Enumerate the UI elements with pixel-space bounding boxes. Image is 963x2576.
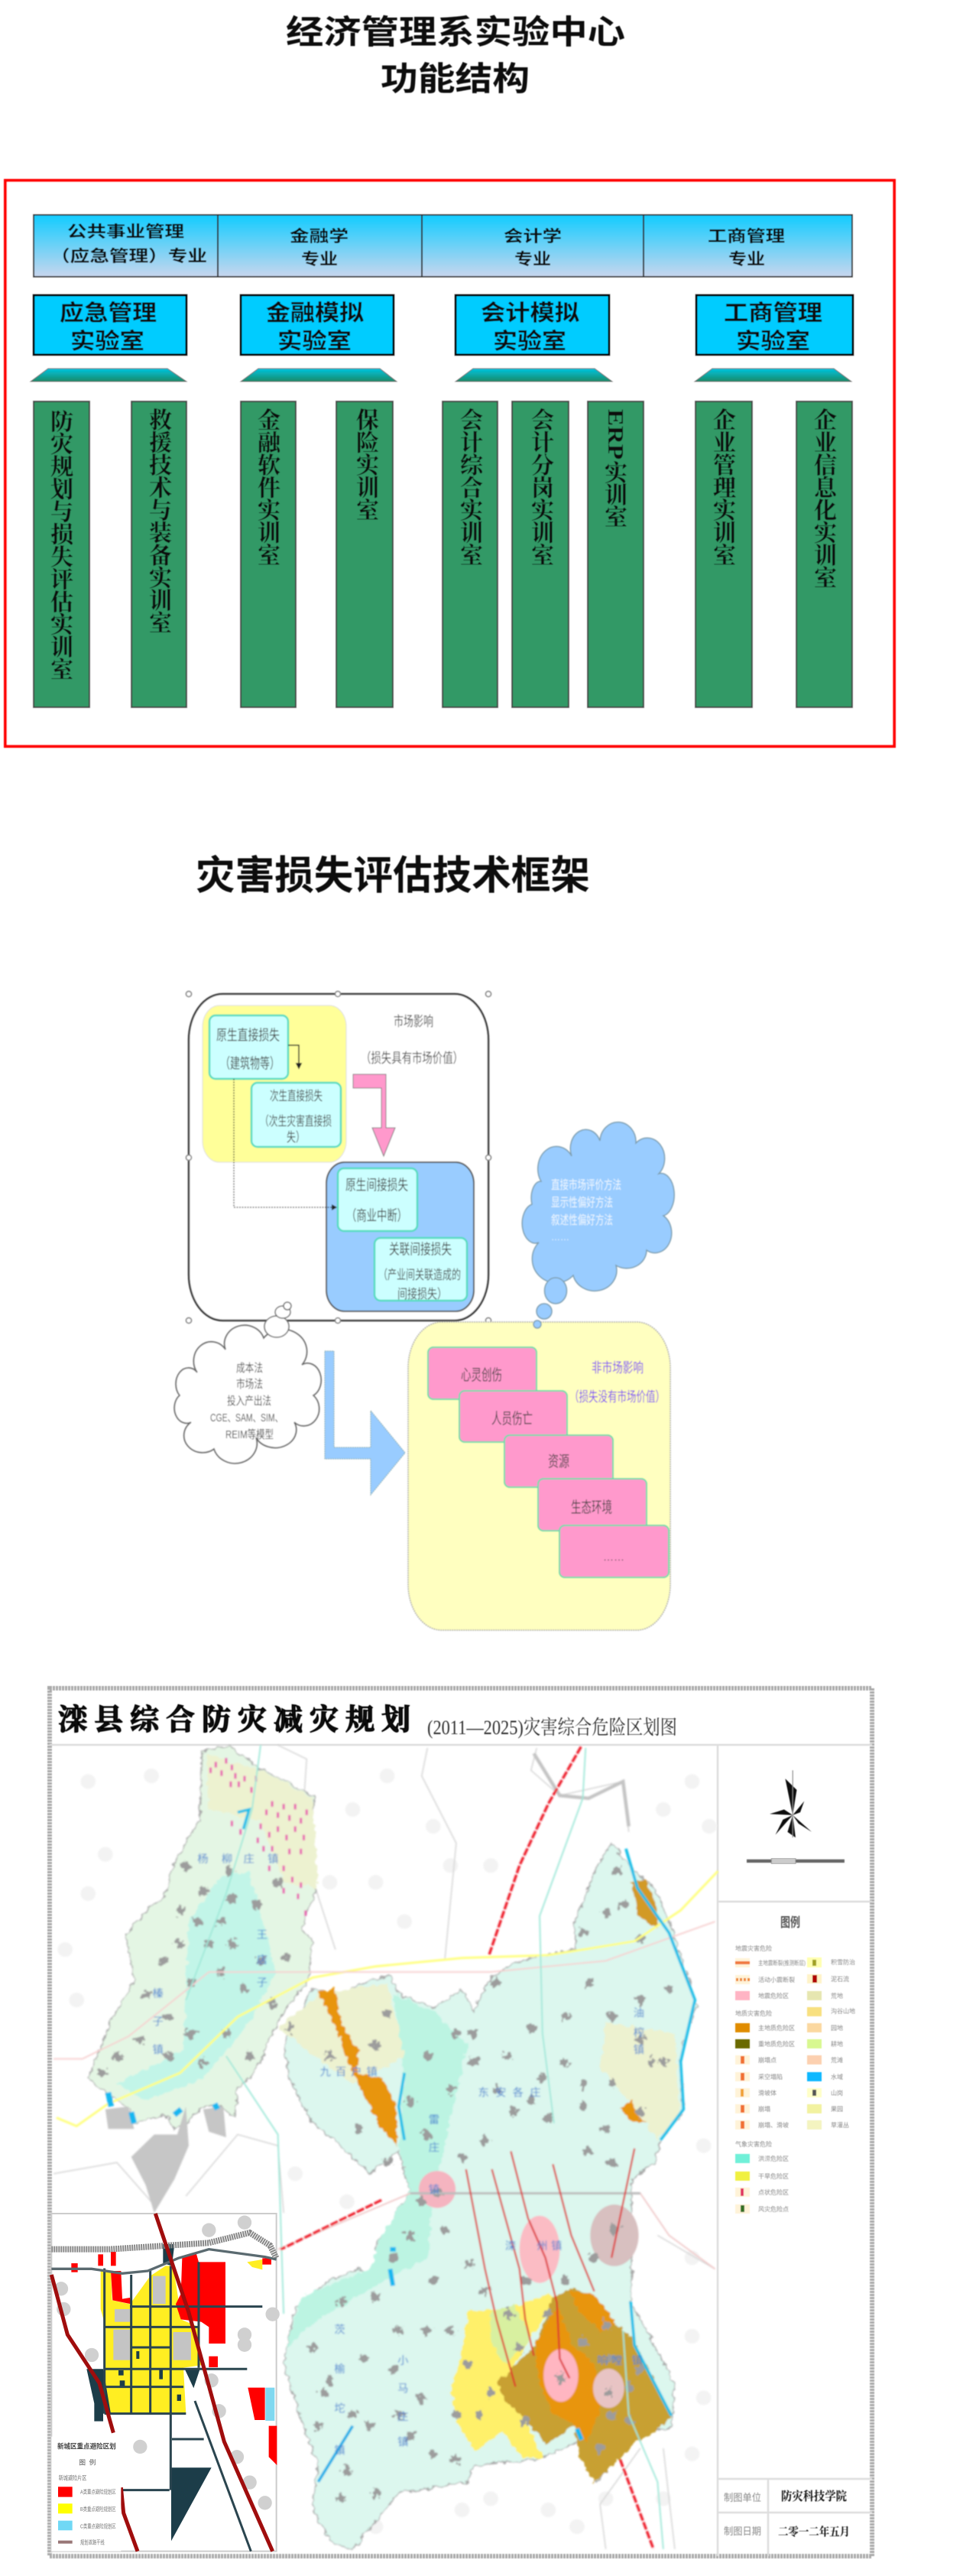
cloud: valuation methods for market losses: 投入产出法 [227,1395,271,1408]
red frame [5,180,894,746]
legend labels [735,1944,855,2213]
legend labels: 荒滩 [831,2056,843,2064]
column labels: 会计综合实训室 [460,408,485,569]
map credits: 二零一二年五月 [778,2525,850,2539]
zone: deeper flood band [287,1994,468,2347]
card: ecological environment: 生态环境 [571,1499,612,1516]
legend labels: 沟谷山地 [831,2007,855,2015]
railway [51,2233,277,2258]
legend labels: 重地质危险区 [758,2040,795,2048]
column labels: 防灾规划与损失评估实训室 [50,410,74,684]
legend labels: 果园 [831,2106,843,2113]
legend labels: 洪涝危险区 [758,2155,789,2162]
map title [58,1704,677,1739]
legend labels: 采空塌陷 [758,2073,783,2081]
panel: market impact [186,991,491,1323]
inset legend [51,2437,121,2552]
town names: 雷庄镇 [429,2113,439,2195]
regions with rough edges [88,1746,697,2549]
lab box: finance simulation: 实验室 [277,329,352,354]
town names: 九百户镇 [320,2066,378,2078]
major header bar: 金融学 [290,227,349,245]
training room columns [34,401,852,707]
title: lab centre function structure: 经济管理系实验中心 [286,15,625,51]
legend swatches [735,1957,822,2214]
maroon expressways [51,2214,273,2552]
inset legend: 图例 [79,2457,96,2466]
zone: pink seismic hazard circles [419,2171,638,2408]
title: lab centre function structure: 功能结构 [381,61,530,98]
major header bar: 专业 [514,251,551,268]
arrow: blue bent arrow [325,1351,405,1495]
cloud: valuation methods for non-market losses: 显示性偏好方法 [551,1196,613,1210]
map inset: new town key evacuation zoning [51,2214,277,2552]
panel: indirect losses: （商业中断） [346,1207,407,1224]
map title: (2011—2025)灾害综合危险区划图 [427,1717,677,1739]
panel: direct losses: （建筑物等） [220,1055,280,1072]
panel: indirect losses: 原生间接损失 [345,1177,408,1194]
yellow zoning [101,2266,201,2414]
cloud: valuation methods for non-market losses: 叙述性偏好方法 [551,1213,613,1227]
inset legend: C类重点避险规划区 [80,2523,116,2530]
legend labels: 山岗 [831,2089,843,2097]
column labels: 金融软件实训室 [258,408,282,569]
town names: 榛子镇 [153,1987,164,2055]
gray settlements in inset [61,2223,273,2503]
card: resources: 资源 [548,1453,569,1470]
panel: indirect losses: 关联间接损失 [389,1241,452,1258]
zone: north-west mint band [117,1871,276,2101]
arrow: pink bent arrow [353,1074,395,1156]
legend labels: 风灾危险点 [758,2205,789,2213]
panel: direct losses: （次生灾害直接损 [260,1114,332,1129]
town names: 茨榆坨镇 [334,2324,345,2456]
chart: loss assessment framework diagram [174,991,674,1630]
panel: market impact: 市场影响 [394,1014,433,1029]
legend labels: 干旱危险区 [758,2172,789,2180]
lab box: finance simulation: 金融模拟 [266,300,364,326]
cloud: valuation methods for non-market losses: 直接市场评价方法 [551,1178,621,1192]
zone: brown geological hazard area [497,2288,671,2483]
panel: non-market impact [408,1322,670,1630]
arrow: dotted link to indirect loss [234,1079,337,1210]
legend: 图例 [780,1915,800,1930]
legend labels: 荒地 [831,1992,843,1999]
zone: orange geological hazard band [318,1879,657,2442]
zones: pale highland [206,1753,680,2140]
column labels: 会计分岗实训室 [531,408,555,569]
lab box: accounting simulation: 会计模拟 [481,300,579,326]
lab box: business administration: 工商管理 [724,300,822,326]
region: central and southern county [284,1843,697,2549]
town names [153,1853,644,2456]
panel: indirect losses: 间接损失） [397,1287,447,1301]
inset legend: B类重点避险规划区 [80,2506,116,2513]
legend labels: 点状危险区 [758,2188,789,2196]
magenta landslide marks [211,1758,306,1916]
gray blocks in yellow zoning [113,2276,191,2360]
major header bar: 专业 [301,251,338,268]
legend labels: 滑坡体 [758,2089,777,2097]
major header bar: （应急管理）专业 [50,247,207,265]
column labels: ERP [603,409,627,460]
map credits: 制图日期 [724,2526,761,2537]
panel: direct losses: 失） [287,1130,305,1145]
zone: yellow drought area [450,2294,557,2457]
column labels: 企业信息化实训室 [814,408,838,592]
map credits [724,2489,850,2539]
major header bar: 专业 [728,251,765,268]
neighbouring county borders [54,1745,715,2549]
major header bar [34,215,852,277]
roads and rivers [54,1745,718,2549]
settlements [102,1866,669,2499]
town names: 油榨镇 [634,2007,644,2055]
active fault lines [466,2149,634,2386]
cloud: valuation methods for market losses: 成本法 [236,1362,263,1375]
lab box: business administration [696,295,853,355]
region: north-west lobe [88,1746,317,2129]
title: disaster loss assessment framework: 灾害损失评估技术框架 [196,854,590,898]
card: casualties: 人员伤亡 [491,1410,533,1428]
panel: market impact: （损失具有市场价值） [361,1051,463,1066]
legend labels: 主地震断裂(推测断层) [758,1959,806,1967]
panel: direct losses: 次生直接损失 [270,1089,323,1103]
legend labels: 水域 [831,2073,843,2081]
major header bar: 会计学 [504,227,562,245]
card: mental trauma: 心灵创伤 [461,1366,502,1384]
map frame and panes [50,1688,872,2556]
gray built-up patch south of the north-west lobe [105,2107,226,2213]
map credits: 制图单位 [724,2492,761,2503]
dark teal blocks [86,2244,212,2541]
faint neighbouring settlements [65,1776,709,2527]
map title: 滦县综合防灾减灾规划 [58,1704,410,1736]
panel: direct losses [203,1005,346,1162]
trapezoid connectors [31,369,851,382]
legend labels: 耕地 [831,2040,843,2048]
lab box: emergency management [34,295,186,355]
column labels: 救援技术与装备实训室 [149,408,173,636]
cloud: valuation methods for market losses: REIM等模型 [225,1428,274,1441]
major header bar: 工商管理 [708,228,785,245]
title: lab centre function structure [286,15,625,98]
lab box: accounting simulation: 实验室 [493,329,566,354]
legend labels: 园地 [831,2024,843,2032]
cloud: valuation methods for market losses: CGE、SAM、SIM、 [210,1411,283,1424]
zone: pale green transition [491,2305,532,2364]
map: county hazard zones [54,1745,718,2549]
card: casualties [459,1391,567,1442]
legend labels: 地震灾害危险 [735,1944,772,1952]
column labels: 实训室 [605,461,628,531]
town names: 滦州镇 [505,2240,562,2252]
town names: 王店子 [257,1928,268,1988]
legend labels: 气象灾害危险 [735,2140,772,2148]
legend labels: 积雪防治 [831,1958,855,1966]
legend labels: 草灌丛 [831,2121,849,2129]
lab box: accounting simulation [456,295,609,355]
town names: 杨柳庄镇 [197,1853,278,1865]
legend labels: 崩塌 [758,2105,770,2113]
panel: Luan county hazard zoning map [50,1688,872,2556]
panel: indirect losses [326,1162,474,1311]
panel: non-market impact: （损失没有市场价值） [569,1389,665,1405]
panel: direct losses: 原生直接损失 [216,1027,280,1044]
lab box: finance simulation [241,295,394,355]
cloud: valuation methods for non-market losses [522,1122,674,1328]
legend labels: 地质灾害危险 [735,2009,772,2017]
town names: 东安各庄 [478,2087,541,2099]
map credits: 防灾科技学院 [781,2489,847,2503]
lab box: emergency management: 实验室 [70,329,144,354]
cyan zoning [265,2388,274,2421]
legend labels: 崩塌、滑坡 [758,2121,789,2129]
town names: 响嘡镇 [597,2354,643,2366]
inset legend: A类重点避险规划区 [80,2489,116,2496]
inset legend: 新城区重点避险区划 [57,2442,116,2451]
column labels: 企业管理实训室 [713,408,737,569]
cloud: valuation methods for market losses [174,1302,321,1463]
card: others: …… [603,1551,624,1563]
cloud: valuation methods for non-market losses: …… [551,1232,569,1243]
legend labels: 泥石流 [831,1975,849,1983]
red zoning [71,2252,277,2465]
major header bar: 公共事业管理 [67,223,184,241]
panel: indirect losses: （产业间关联造成的 [378,1268,461,1282]
cloud: valuation methods for market losses: 市场法 [236,1378,263,1391]
legend [735,1915,855,2214]
lab box: business administration: 实验室 [736,329,810,354]
dashed fault line [280,1746,653,2549]
panel: organisation chart in red frame [5,180,894,746]
legend labels: 崩塌点 [758,2056,777,2064]
inset road grid [105,2262,262,2552]
inset legend: 新城避险片区 [59,2474,86,2481]
arrow: primary to secondary direct loss [288,1045,301,1068]
town names: 小马庄镇 [397,2354,408,2448]
scale bar [747,1858,845,1864]
card: resources [504,1435,613,1487]
panel: non-market impact: 非市场影响 [592,1360,644,1376]
legend labels: 活动小震断裂 [758,1976,795,1983]
card: ecological environment [538,1479,647,1531]
legend labels: 地震危险区 [758,1992,789,1999]
column labels: 保险实训室 [356,408,380,524]
column labels [50,408,838,684]
card: mental trauma [428,1347,537,1399]
card: others [559,1525,669,1577]
icon: north arrow [770,1770,812,1837]
legend labels: 主地质危险区 [758,2024,795,2032]
lab box: emergency management: 应急管理 [60,300,157,326]
inset legend: 规划道路干线 [80,2539,105,2546]
